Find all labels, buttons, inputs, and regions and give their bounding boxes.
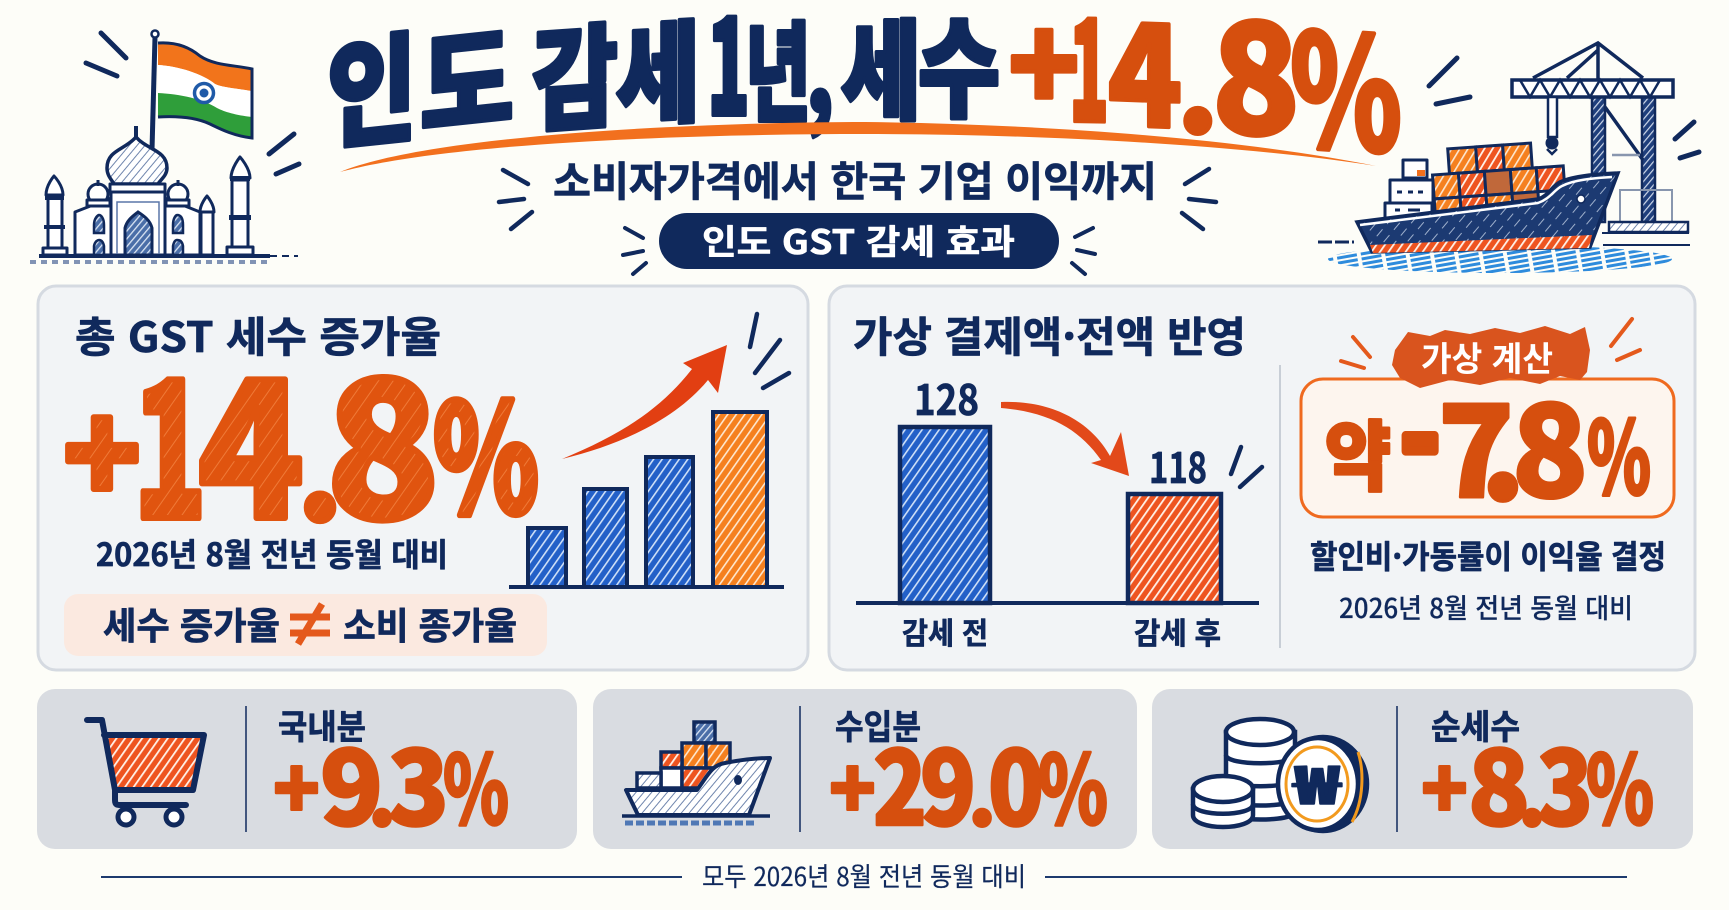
value: .	[368, 732, 396, 848]
big figure: +14.8%	[63, 302, 539, 572]
badge: GST pill	[623, 213, 1095, 274]
value: +	[829, 726, 876, 842]
vertical divider	[1279, 365, 1281, 648]
callout: -7.8% box	[1301, 346, 1674, 535]
arrow: falling	[1001, 402, 1129, 476]
callout: -7.8% box: %	[1587, 378, 1651, 523]
big figure: +14.8%: .	[298, 372, 342, 553]
value: .	[968, 732, 996, 848]
not-equal sign	[290, 604, 330, 644]
sparks around flag	[86, 33, 299, 174]
card: net revenue	[1152, 689, 1693, 855]
callout: revenue growth is not consumption growth	[64, 594, 547, 656]
bar chart: before and after: 감세 전	[902, 609, 988, 653]
value: 9	[920, 708, 976, 855]
big figure: +14.8%: +	[63, 351, 141, 542]
card: imports	[593, 689, 1137, 855]
icon: shopping cart	[87, 720, 204, 825]
big figure: +14.8%: 8	[326, 302, 440, 572]
comparison note: 2026년 8월 전년 동월 대비	[96, 530, 448, 576]
bar chart: rising revenue	[509, 412, 784, 587]
label: 국내분	[278, 700, 366, 749]
bar chart: before and after: 128	[914, 367, 979, 428]
badge: virtual calculation	[1341, 319, 1640, 388]
sparks around ship	[1429, 58, 1699, 158]
sparks	[750, 314, 789, 388]
value: 0	[988, 708, 1044, 855]
card: domestic	[37, 689, 577, 855]
badge sparks	[623, 228, 1095, 274]
value: 8	[1468, 708, 1530, 855]
value: .	[1518, 732, 1546, 848]
icon: Indian flag	[158, 43, 252, 138]
bar chart: before and after: 감세 후	[1134, 609, 1221, 653]
value	[1421, 708, 1654, 855]
panel: total GST revenue growth	[38, 286, 808, 670]
subtitle sparks	[499, 169, 1216, 229]
callout: -7.8% box: -	[1400, 346, 1440, 527]
value: 2	[873, 708, 927, 855]
sparks	[1231, 447, 1262, 487]
badge text: 인도 GST 감세 효과	[702, 215, 1015, 264]
callout: revenue growth is not consumption growth: 소비 종가율	[343, 596, 517, 650]
value	[829, 708, 1108, 855]
comparison note: 2026년 8월 전년 동월 대비	[1339, 587, 1633, 626]
icon: port crane	[1512, 43, 1690, 245]
icon: ship hull	[1318, 173, 1618, 253]
title underline swoosh	[340, 122, 1376, 172]
big figure: +14.8%: %	[433, 340, 539, 557]
divider	[1396, 706, 1398, 832]
icon: water	[1328, 245, 1672, 273]
panel heading: 총 GST 세수 증가율	[75, 304, 441, 365]
bar chart: before and after: 118	[1149, 435, 1207, 496]
icon: ship bridge	[1385, 160, 1433, 219]
panel: virtual payment	[829, 286, 1695, 670]
value: %	[443, 715, 509, 852]
panel heading: 가상 결제액·전액 반영	[853, 304, 1246, 365]
icon: won sign: ₩	[1291, 744, 1342, 819]
value: 9	[320, 708, 383, 855]
value: 3	[1537, 708, 1593, 855]
big figure: +14.8%: 1	[133, 302, 207, 572]
big figure: +14.8%: 4	[198, 302, 304, 572]
callout: revenue growth is not consumption growth: 세수 증가율	[103, 596, 280, 650]
icon: container ship	[622, 722, 770, 823]
title	[327, 0, 1402, 198]
value	[273, 708, 509, 855]
icon: flag pole	[152, 30, 158, 150]
bar chart: before and after	[856, 367, 1259, 653]
icon: stacked containers	[1431, 141, 1566, 221]
illustration: cargo ship and crane	[1318, 43, 1699, 273]
arrow: rising	[562, 345, 727, 459]
callout: -7.8% box: 8	[1512, 352, 1588, 533]
title: orange figure	[1008, 0, 1402, 198]
badge: virtual calculation: 가상 계산	[1421, 332, 1553, 381]
note: discount and utilisation: 할인비·가동률이 이익율 결정	[1310, 532, 1666, 578]
divider	[799, 706, 801, 832]
subtitle	[499, 148, 1216, 229]
subtitle text: 소비자가격에서 한국 기업 이익까지	[553, 148, 1157, 208]
icon: Taj Mahal	[30, 126, 298, 262]
divider	[245, 706, 247, 832]
badge sparks	[1341, 319, 1640, 368]
label: 순세수	[1431, 700, 1520, 749]
value: 3	[388, 708, 449, 855]
title: navy words	[327, 0, 1000, 174]
callout: -7.8% box: .	[1480, 347, 1526, 535]
label: 수입분	[835, 700, 921, 749]
value: +	[1421, 726, 1468, 842]
value: +	[273, 726, 320, 842]
footer note: 모두 2026년 8월 전년 동월 대비	[702, 857, 1026, 894]
icon: coins	[1193, 719, 1367, 831]
illustration: Taj Mahal with Indian flag	[30, 30, 299, 262]
value: %	[1038, 715, 1108, 852]
callout: -7.8% box: 약	[1325, 396, 1391, 506]
callout: -7.8% box: 7	[1438, 352, 1514, 533]
value: %	[1586, 715, 1654, 852]
